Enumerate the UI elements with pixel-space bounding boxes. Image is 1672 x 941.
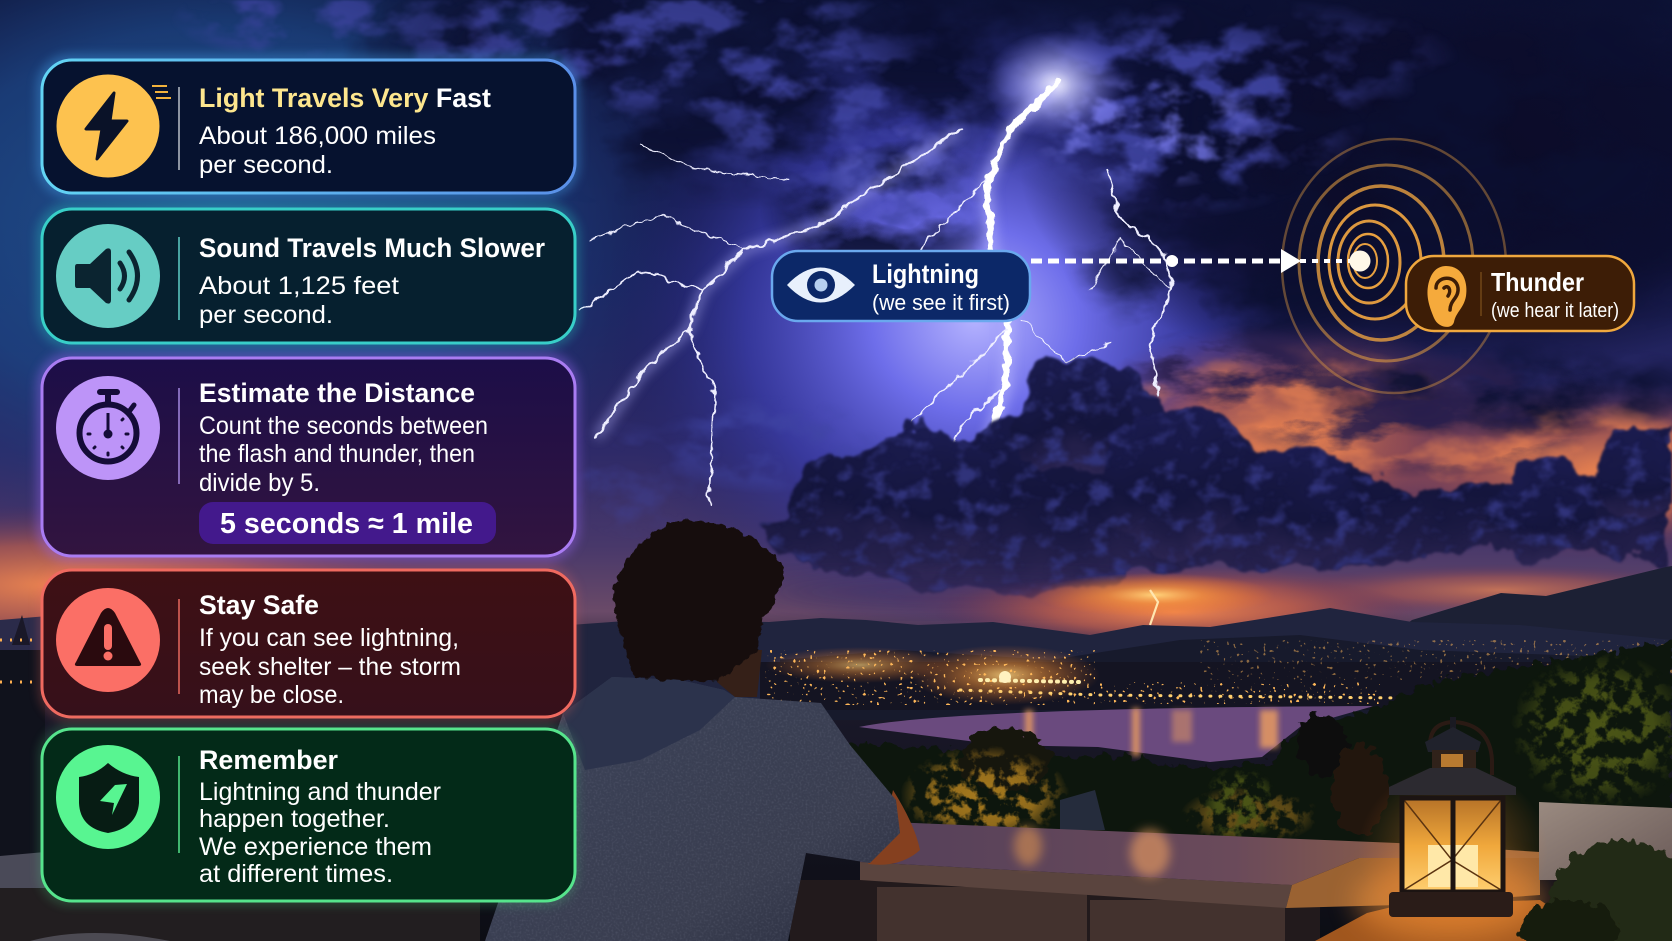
panel: estimate the distance: Estimate the Distance bbox=[199, 378, 475, 408]
icon: warning triangle bbox=[56, 588, 160, 692]
storm clouds: lit layer bbox=[170, 0, 1460, 540]
cloud underside haze bbox=[750, 574, 1170, 610]
lake bbox=[859, 706, 1374, 762]
panel: sound travels much slower: Sound Travels Much Slower bbox=[199, 233, 545, 263]
icon: shield with bolt bbox=[56, 745, 160, 849]
left balcony wall bbox=[0, 852, 480, 941]
panel: stay safe: may be close. bbox=[199, 681, 344, 709]
panel: light travels very fast: About 186,000 miles bbox=[199, 122, 436, 150]
dashed arrow from lightning to thunder bbox=[1031, 249, 1370, 273]
callout: 5 seconds about 1 mile: 5 seconds ≈ 1 mile bbox=[220, 508, 473, 540]
right foreground shrubs bbox=[1520, 840, 1672, 941]
panel: stay safe: If you can see lightning, bbox=[199, 624, 459, 652]
panel: remember: at different times. bbox=[199, 860, 393, 888]
hoodie and t-shirt bbox=[485, 677, 900, 941]
arm bbox=[868, 790, 920, 865]
panel: remember: Lightning and thunder bbox=[199, 778, 441, 806]
callout: 5 seconds about 1 mile bbox=[199, 502, 496, 544]
panel: remember: Remember bbox=[199, 745, 338, 775]
rain curtain over distant hills bbox=[935, 572, 1415, 652]
panel: estimate the distance: the flash and thunder, then bbox=[199, 440, 475, 468]
sunset clouds on the right bbox=[1080, 325, 1672, 540]
cumulus cloud bank bbox=[765, 353, 1672, 590]
panel: estimate the distance bbox=[36, 352, 580, 562]
sound wave rings bbox=[1282, 139, 1506, 393]
panel: sound travels much slower bbox=[36, 203, 580, 348]
label: lightning: Lightning bbox=[872, 259, 979, 289]
icon: stopwatch bbox=[56, 376, 160, 480]
hair bbox=[612, 521, 784, 682]
panel: estimate the distance: divide by 5. bbox=[199, 469, 320, 497]
panel: estimate the distance: Count the seconds between bbox=[199, 412, 488, 440]
balcony wall bbox=[790, 802, 1672, 941]
icon: eye bbox=[787, 268, 855, 302]
panel: stay safe bbox=[38, 565, 578, 722]
person watching the storm bbox=[485, 521, 920, 941]
town lights bbox=[760, 640, 1672, 710]
panel: stay safe: Stay Safe bbox=[199, 590, 319, 620]
icon: speaker bbox=[56, 224, 160, 328]
hood folds bbox=[563, 677, 735, 770]
label: thunder: (we hear it later) bbox=[1491, 300, 1619, 322]
lightning bolts bbox=[581, 82, 1172, 505]
storm clouds: dark upper layer bbox=[280, 0, 1672, 440]
label: lightning: (we see it first) bbox=[872, 290, 1010, 315]
panel: remember: happen together. bbox=[199, 805, 390, 833]
fabric texture bbox=[485, 677, 900, 941]
panel: sound travels much slower: per second. bbox=[199, 301, 333, 329]
left hills and lights bbox=[0, 615, 45, 860]
panel: remember: We experience them bbox=[199, 833, 432, 861]
panel: sound travels much slower: About 1,125 feet bbox=[199, 272, 399, 300]
panel: light travels very fast: Light Travels Very Fast bbox=[199, 83, 491, 113]
mountains bbox=[0, 566, 1672, 720]
panel: light travels very fast bbox=[36, 54, 580, 198]
lantern bbox=[1358, 717, 1548, 935]
label: thunder bbox=[1406, 256, 1634, 331]
icon: ear bbox=[1427, 266, 1466, 327]
panel: light travels very fast: per second. bbox=[199, 151, 333, 179]
label: thunder: Thunder bbox=[1491, 267, 1584, 297]
trees bbox=[840, 640, 1672, 860]
panel: remember bbox=[38, 724, 578, 906]
icon: lightning bolt bbox=[56, 74, 171, 178]
neck bbox=[717, 650, 762, 697]
label: lightning bbox=[772, 251, 1030, 321]
panel: stay safe: seek shelter – the storm bbox=[199, 653, 461, 681]
